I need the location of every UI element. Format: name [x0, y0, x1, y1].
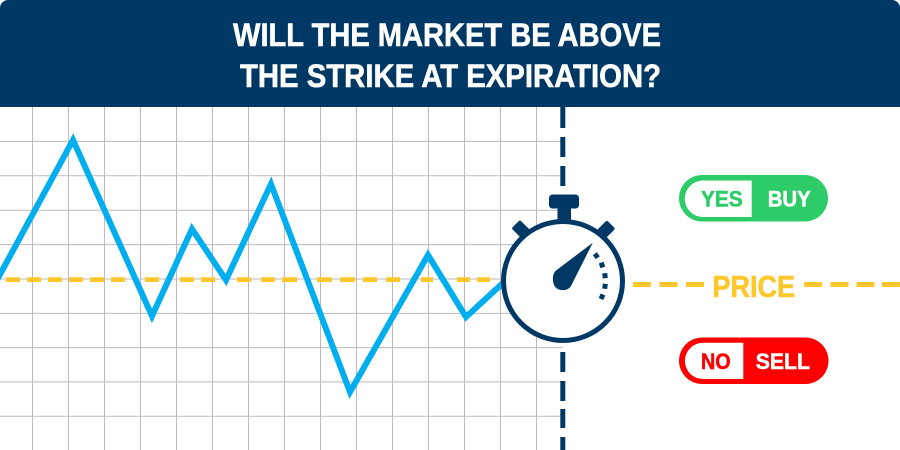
icon: stopwatch	[504, 194, 622, 340]
no sell toggle: NO	[701, 349, 731, 374]
vertical dashed expiration line	[560, 107, 565, 450]
price label: PRICE	[712, 269, 795, 304]
title: THE STRIKE AT EXPIRATION?	[240, 58, 661, 94]
title	[233, 17, 661, 94]
grid	[0, 107, 563, 450]
no sell toggle	[679, 338, 828, 384]
no sell toggle: SELL	[756, 349, 810, 374]
title: WILL THE MARKET BE ABOVE	[233, 17, 661, 53]
needle	[553, 243, 593, 290]
header banner	[0, 0, 900, 107]
tick marks	[593, 252, 608, 300]
strike price dashed line	[6, 277, 490, 282]
price line chart	[0, 140, 504, 392]
yes buy toggle	[679, 175, 828, 222]
yes buy toggle: YES	[701, 186, 743, 211]
yes buy toggle: BUY	[768, 186, 811, 211]
